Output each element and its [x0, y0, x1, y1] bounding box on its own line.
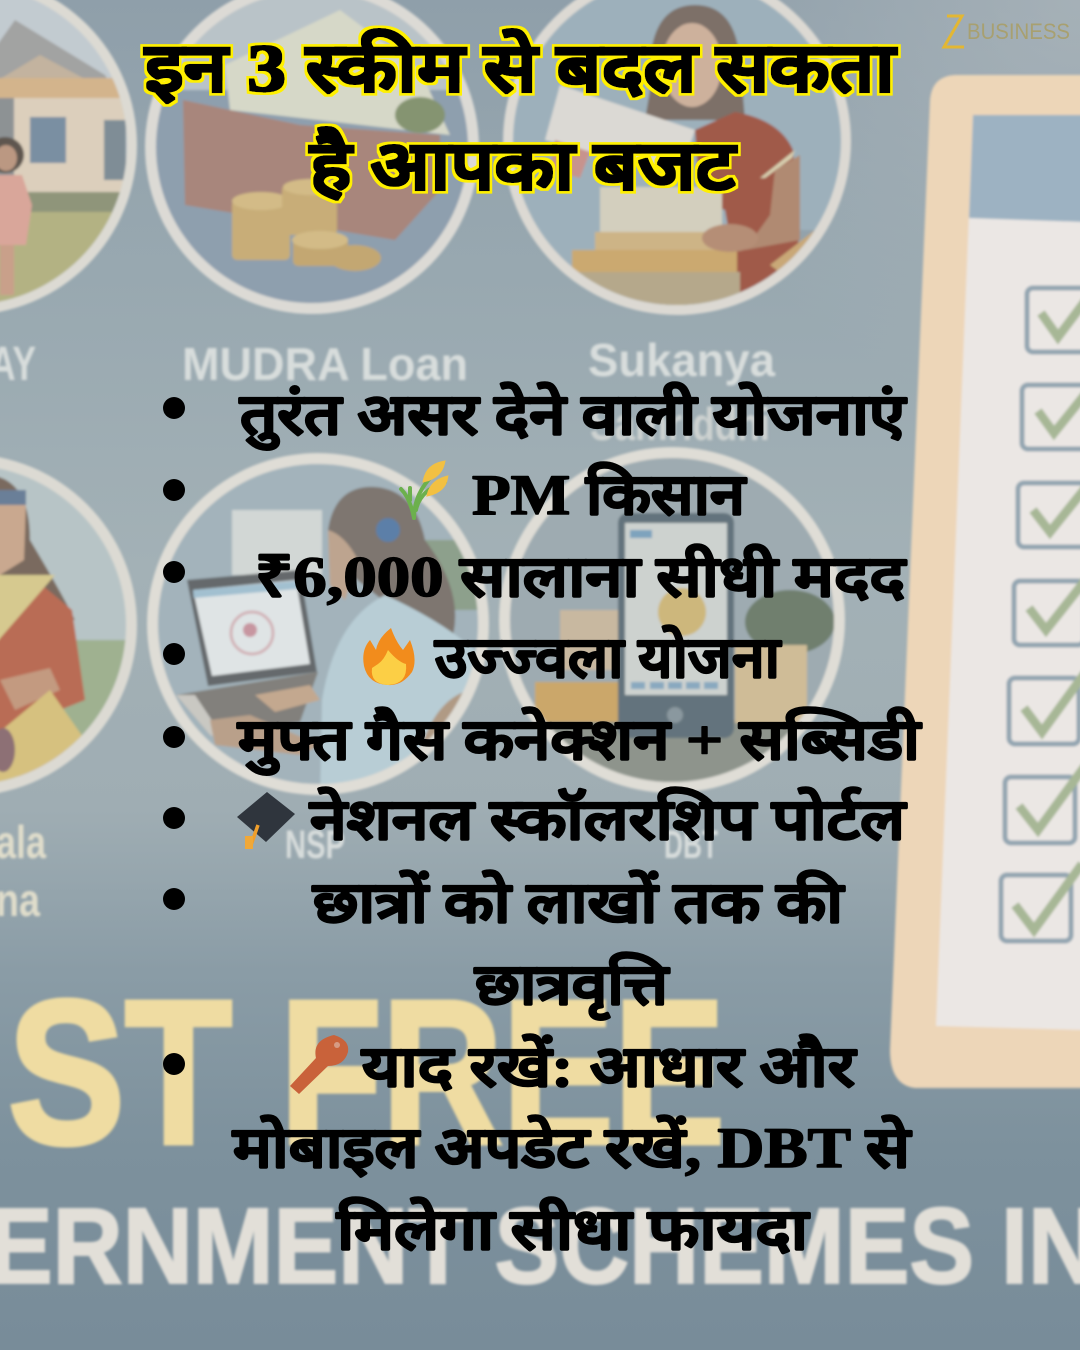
background label: scheme names: DBT	[664, 823, 718, 867]
line: direct benefit: मिलेगा सीधा फायदा	[336, 1197, 811, 1262]
clipboard	[890, 75, 1080, 1088]
checkbox list	[1001, 288, 1080, 941]
line: 6000 annual: ₹6,000 सालाना सीधी मदद	[255, 544, 907, 609]
line: Ujjwala: उज्ज्वला योजना	[434, 625, 782, 690]
bullet markers	[163, 397, 185, 1075]
circle: woman in sari	[0, 454, 140, 800]
big background heading: ST FREE	[8, 958, 725, 1187]
background label: scheme names	[0, 334, 775, 926]
icon: fire	[363, 628, 415, 685]
background label: scheme names: MUDRA Loan	[182, 338, 468, 390]
circle: housing scheme	[0, 0, 140, 315]
background label: scheme names: NSP	[285, 823, 345, 867]
circle: wallet and coins	[145, 0, 480, 314]
circle: phone with DBT	[499, 447, 845, 800]
title	[143, 29, 898, 204]
icon: key	[290, 1035, 348, 1094]
background label: scheme names: Samriddhi	[590, 398, 770, 450]
title: है आपका बजट	[308, 127, 738, 204]
circle: student at laptop	[147, 453, 490, 800]
line: remember aadhaar: याद रखें: आधार और	[361, 1034, 858, 1099]
line: mobile update: मोबाइल अपडेट रखें, DBT से	[232, 1115, 913, 1180]
line: PM Kisan: PM किसान	[472, 462, 748, 527]
icon: graduation cap	[237, 792, 295, 849]
line: immediate schemes: तुरंत असर देने वाली योजनाएं	[239, 382, 908, 451]
title: इन 3 स्कीम से बदल सकता	[143, 29, 898, 106]
line: scholarship: छात्रवृत्ति	[474, 952, 671, 1021]
line: free gas: मुफ्त गैस कनेक्शन + सब्सिडी	[237, 707, 923, 776]
logo: Z Business	[944, 16, 1070, 47]
background label: scheme names: Sukanya	[588, 334, 775, 386]
icon: wheat	[401, 463, 446, 518]
circle: woman with documents	[503, 0, 851, 330]
big background heading: ST FREE: ST	[8, 958, 232, 1187]
bullet list	[163, 382, 923, 1262]
logo: Z Business: BUSINESS	[967, 19, 1070, 44]
line: national scholarship: नेशनल स्कॉलरशिप पोर्टल	[309, 787, 908, 852]
line: students lakhs: छात्रों को लाखों तक की	[312, 870, 846, 935]
big background heading: ST FREE: FREE	[280, 958, 725, 1187]
